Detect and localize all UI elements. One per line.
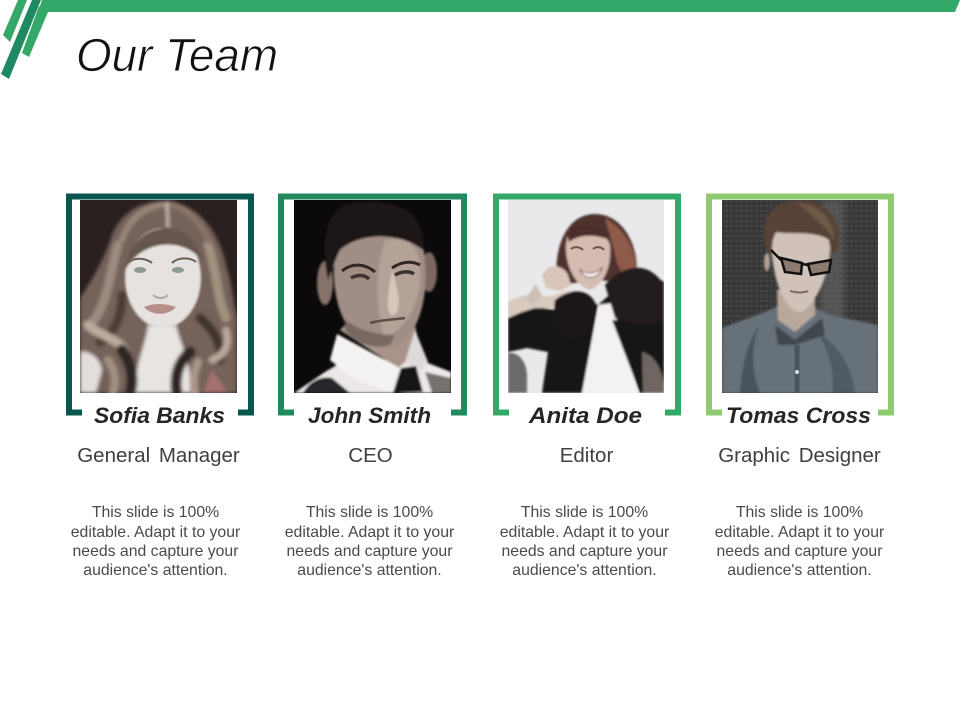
description: This slide is 100% [306, 504, 433, 521]
description: needs and capture your [73, 543, 238, 560]
description: needs and capture your [287, 543, 452, 560]
description: audience's attention. [727, 562, 872, 579]
role: General Manager [77, 444, 240, 467]
description: This slide is 100% [92, 504, 219, 521]
description: audience's attention. [297, 562, 442, 579]
frame [69, 196, 251, 412]
title: Our Team [76, 29, 278, 81]
description: audience's attention. [83, 562, 228, 579]
description [285, 504, 454, 579]
name: Sofia Banks [94, 403, 225, 428]
frame [709, 196, 891, 412]
team card: Tomas Cross [709, 196, 891, 579]
header accent: bar and slashes [1, 0, 960, 79]
role: CEO [348, 444, 393, 467]
description [71, 504, 240, 579]
description: editable. Adapt it to your [285, 524, 454, 541]
frame [496, 196, 678, 412]
name: John Smith [308, 403, 431, 428]
photo: John Smith [294, 200, 451, 393]
description: needs and capture your [502, 543, 667, 560]
photo: Tomas Cross [722, 200, 878, 393]
name: Tomas Cross [726, 403, 871, 428]
team card: John Smith [281, 196, 464, 579]
description: This slide is 100% [736, 504, 863, 521]
description: editable. Adapt it to your [715, 524, 884, 541]
role: Editor [560, 444, 613, 467]
name: Anita Doe [528, 403, 642, 428]
photo: Sofia Banks [80, 200, 237, 393]
description [500, 504, 669, 579]
photo: Anita Doe [508, 200, 664, 393]
description: This slide is 100% [521, 504, 648, 521]
team card: Anita Doe [496, 196, 678, 579]
role: Graphic Designer [718, 444, 881, 467]
description [715, 504, 884, 579]
description: editable. Adapt it to your [500, 524, 669, 541]
description: editable. Adapt it to your [71, 524, 240, 541]
frame [281, 196, 464, 412]
description: needs and capture your [717, 543, 882, 560]
team card: Sofia Banks [69, 196, 251, 579]
description: audience's attention. [512, 562, 657, 579]
